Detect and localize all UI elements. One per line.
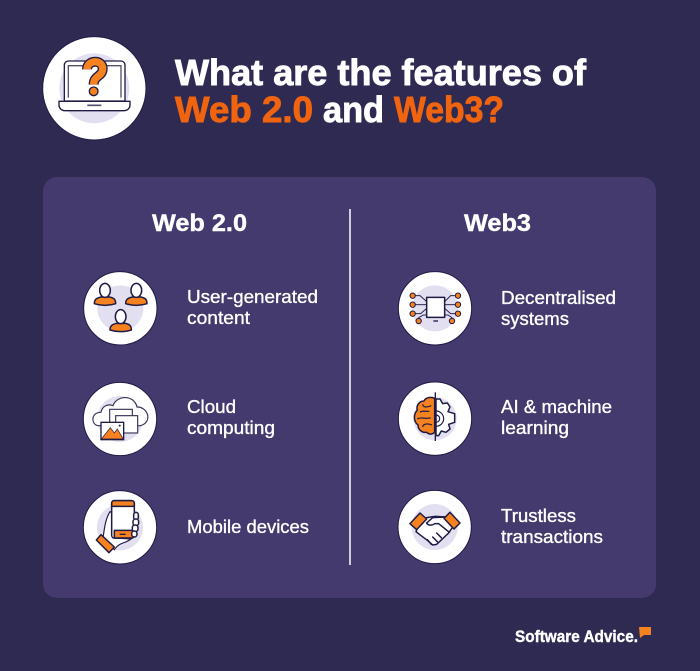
panel: comparison	[43, 177, 656, 598]
icon: cloud computing	[83, 382, 157, 456]
text: Cloud computing: Cloud	[187, 396, 236, 417]
text: Decentralised systems: systems	[501, 308, 569, 329]
text: AI & machine learning	[501, 396, 612, 438]
icon: hand holding phone	[83, 491, 157, 564]
heading: Web3: Web3	[464, 210, 531, 237]
icon: users	[84, 272, 157, 345]
icon: handshake	[398, 490, 471, 564]
text: AI & machine learning: AI & machine	[501, 396, 612, 417]
icon: brain and gear	[398, 382, 472, 455]
title: What are the features of	[175, 52, 587, 93]
title: Web 2.0	[175, 89, 313, 130]
text: Mobile devices: Mobile devices	[187, 516, 309, 537]
text: Trustless transactions	[501, 505, 603, 547]
logo: Software Advice: Software Advice.	[515, 627, 638, 646]
title: Web3?	[394, 89, 504, 130]
icon: laptop with question mark	[43, 37, 146, 140]
text: User-generated content: content	[187, 307, 250, 328]
text: Cloud computing: computing	[187, 417, 275, 438]
heading: Web 2.0: Web 2.0	[152, 210, 247, 237]
text: Trustless transactions: transactions	[501, 526, 603, 547]
text: Decentralised systems: Decentralised	[501, 287, 616, 308]
icon: decentralised chip	[398, 272, 472, 345]
text: Cloud computing	[187, 396, 275, 438]
text: AI & machine learning: learning	[501, 417, 569, 438]
text: User-generated content: User-generated	[187, 286, 318, 307]
title: and	[323, 89, 384, 130]
title	[175, 52, 587, 130]
text: User-generated content	[187, 286, 318, 328]
text: Decentralised systems	[501, 287, 616, 329]
text: Trustless transactions: Trustless	[501, 505, 576, 526]
